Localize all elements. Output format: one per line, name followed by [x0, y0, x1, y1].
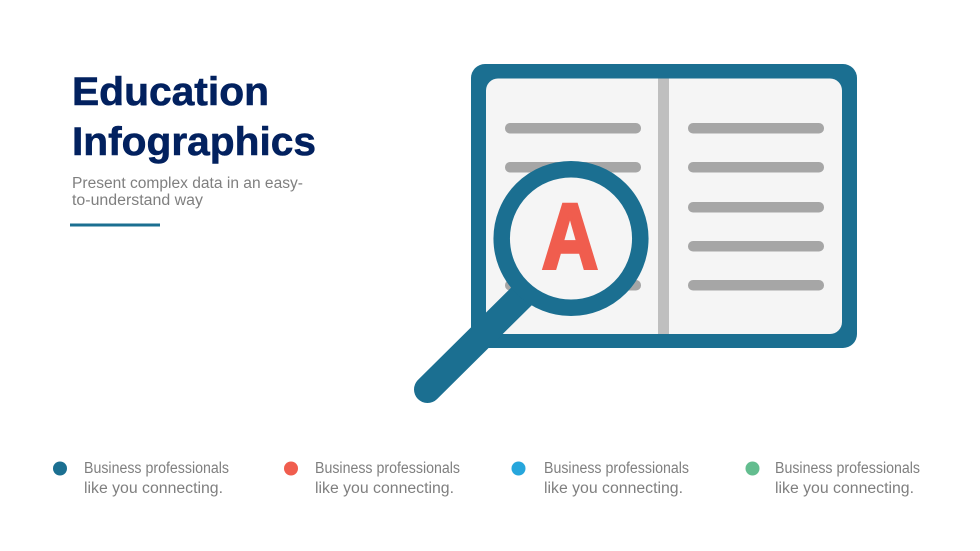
book spine [658, 78, 669, 334]
dot: green [746, 462, 760, 476]
legend item 2 [284, 460, 460, 497]
legend text 4 [775, 460, 920, 497]
title: Infographics [72, 120, 316, 164]
legend text 3 [544, 460, 689, 497]
legend text 3: like you connecting. [544, 480, 683, 497]
subtitle: Present complex data in an easy- [72, 175, 303, 192]
icon: open book with magnifying glass [428, 64, 857, 390]
subtitle [72, 175, 303, 209]
title [72, 70, 316, 164]
magnifier lens [502, 169, 640, 308]
magnifier handle [428, 288, 530, 390]
legend text 4: like you connecting. [775, 480, 914, 497]
legend text 1 [84, 460, 229, 497]
subtitle: to-understand way [72, 192, 203, 209]
legend text 1: like you connecting. [84, 480, 223, 497]
book pages [486, 78, 842, 334]
right page text lines [688, 123, 824, 290]
legend text 3: Business professionals [544, 460, 689, 477]
dot: light blue [512, 462, 526, 476]
legend item 4 [746, 460, 920, 497]
legend text 2: like you connecting. [315, 480, 454, 497]
title underline [70, 224, 160, 226]
left page text lines [505, 123, 641, 290]
title: Education [72, 70, 269, 114]
legend text 4: Business professionals [775, 460, 920, 477]
letter A: A [542, 184, 598, 288]
legend text 2: Business professionals [315, 460, 460, 477]
legend text 2 [315, 460, 460, 497]
dot: dark blue [53, 462, 67, 476]
legend item 1 [53, 460, 229, 497]
legend item 3 [512, 460, 689, 497]
book cover [471, 64, 857, 348]
legend text 1: Business professionals [84, 460, 229, 477]
dot: red [284, 462, 298, 476]
